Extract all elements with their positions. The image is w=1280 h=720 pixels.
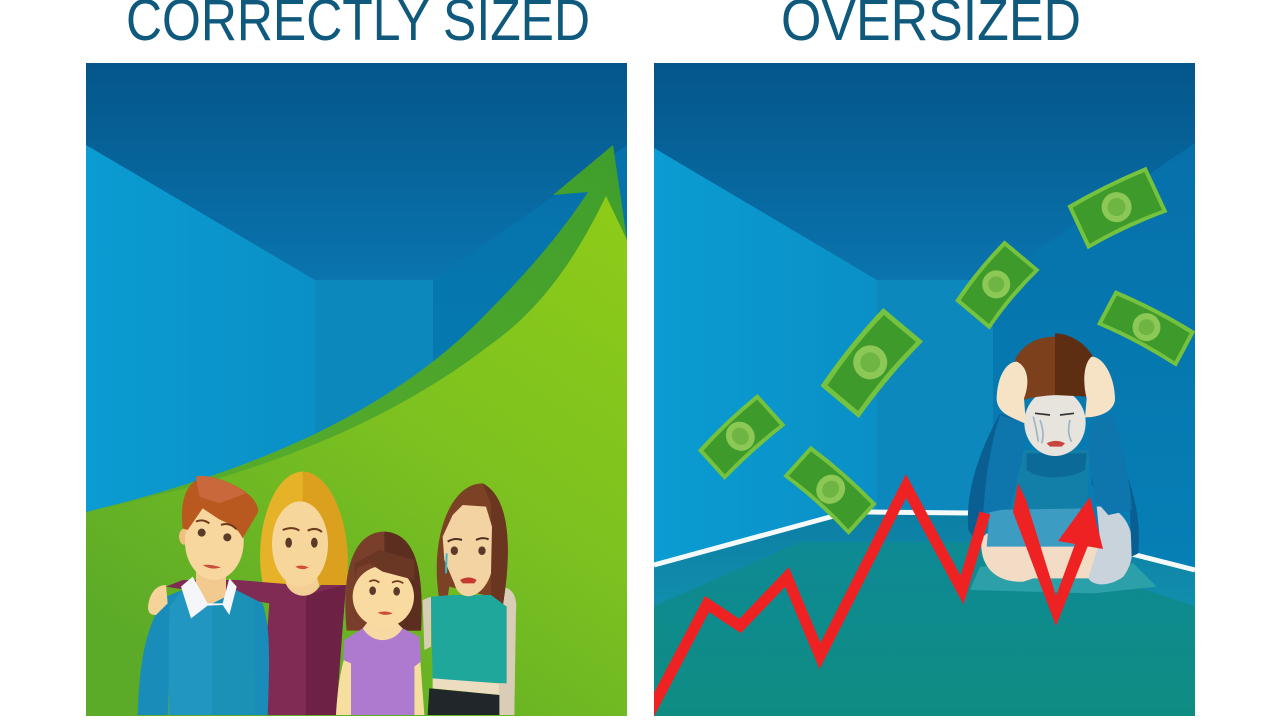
head	[997, 333, 1115, 456]
boy	[138, 476, 269, 715]
floor	[654, 511, 1195, 716]
red arrow chart line	[648, 483, 1103, 716]
teen	[423, 483, 516, 715]
bill 5	[1066, 166, 1167, 249]
falling bills	[696, 166, 1196, 535]
panel: oversized	[648, 63, 1196, 716]
room background	[654, 63, 1195, 716]
bill 2	[818, 307, 923, 418]
growth arrow	[86, 145, 627, 716]
bill 1	[696, 393, 786, 480]
mother	[166, 472, 348, 715]
crying person	[968, 333, 1157, 593]
bill 3	[783, 444, 878, 535]
bill 4	[953, 240, 1040, 330]
floor shadow	[970, 563, 1157, 593]
girl	[336, 532, 424, 715]
family illustration	[138, 472, 516, 715]
panel: correctly sized	[86, 63, 627, 716]
room background	[86, 63, 627, 716]
bill 6	[1097, 288, 1196, 367]
body	[968, 413, 1139, 584]
